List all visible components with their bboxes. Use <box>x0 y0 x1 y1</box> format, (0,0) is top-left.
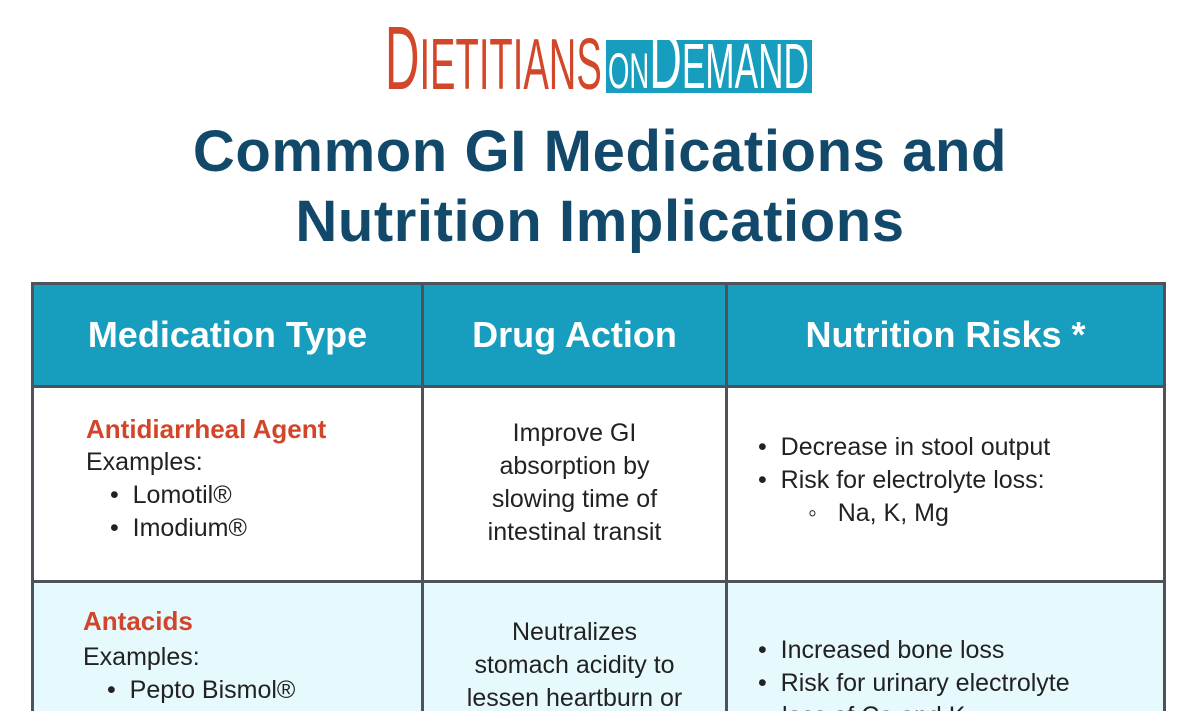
header: Drug Action: Drug Action <box>472 314 677 355</box>
row 1: antidiarrheal: • Imodium® <box>110 514 247 542</box>
row 1: drug action <box>421 385 728 583</box>
row 1: drug action: slowing time of <box>492 485 657 513</box>
row 1: antidiarrheal: Examples: <box>86 448 203 476</box>
header: Nutrition Risks: Nutrition Risks * <box>805 314 1086 355</box>
logo box: on Demand <box>606 40 812 93</box>
header: Medication Type: Medication Type <box>88 314 367 355</box>
row 2: risks: • Increased bone loss <box>758 636 1004 664</box>
row 2: drug action <box>421 580 728 711</box>
row 1: risks: • Risk for electrolyte loss: <box>758 466 1045 494</box>
header: Nutrition Risks <box>725 282 1166 388</box>
title: Common GI Medications and <box>193 119 1007 184</box>
title <box>193 119 1007 254</box>
row 1: antidiarrheal: • Lomotil® <box>110 481 232 509</box>
row 2: drug action: stomach acidity to <box>474 651 675 679</box>
logo: ONDEMAND <box>608 15 809 106</box>
row 2: antacids: Antacids <box>83 606 193 636</box>
header: Medication Type <box>31 282 424 388</box>
row 1: antidiarrheal <box>31 385 424 583</box>
row 1: antidiarrheal: Antidiarrheal Agent <box>86 414 326 444</box>
logo <box>385 9 812 109</box>
row 1: drug action: absorption by <box>499 452 650 480</box>
header: Drug Action <box>421 282 728 388</box>
row 2: drug action: Neutralizes <box>512 618 637 646</box>
row 2: risks <box>725 580 1166 711</box>
row 1: drug action: intestinal transit <box>488 518 661 546</box>
row 2: risks: • Risk for urinary electrolyte <box>758 669 1070 697</box>
logo text: Dietitians: DIETITIANS <box>385 9 602 109</box>
row 2: antacids <box>31 580 424 711</box>
row 1: risks <box>725 385 1166 583</box>
row 1: drug action: Improve GI <box>513 419 636 447</box>
row 2: antacids: • Pepto Bismol® <box>107 676 295 704</box>
title: Nutrition Implications <box>295 189 905 254</box>
row 2: antacids: Examples: <box>83 643 200 671</box>
row 1: risks: • Decrease in stool output <box>758 433 1050 461</box>
row 1: risks: ◦ Na, K, Mg <box>808 499 949 527</box>
table <box>31 282 1166 711</box>
